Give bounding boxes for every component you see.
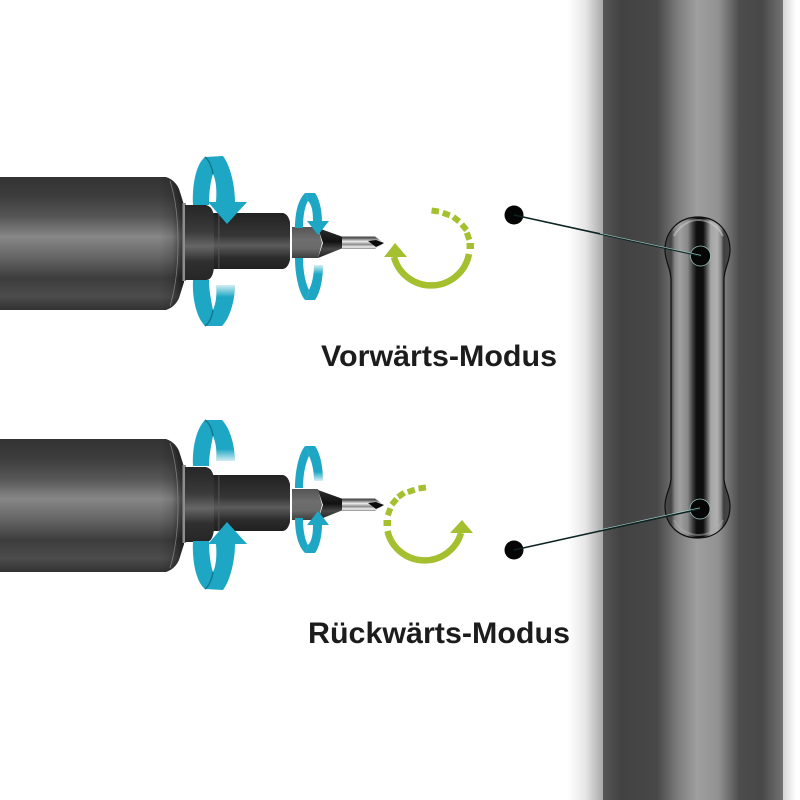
forward marker dot: [504, 206, 524, 224]
mode switch slot: [665, 217, 730, 538]
top rotation arrows: [193, 156, 329, 326]
bottom green counter-clockwise arrow: [384, 484, 473, 560]
reverse leader line: [514, 508, 700, 550]
switch reverse point: [690, 499, 710, 519]
reverse marker dot: [504, 540, 524, 560]
switch forward point: [690, 246, 710, 266]
bottom rotation arrows: [193, 420, 329, 590]
bottom driver: reverse mode: [0, 439, 384, 572]
screwdriver handle with mode switch: [568, 0, 796, 800]
heading: forward mode: Vorwärts-Modus: [321, 340, 557, 373]
top driver: forward mode: [0, 177, 384, 310]
forward leader line: [514, 215, 701, 256]
top green clockwise arrow: [384, 208, 474, 285]
heading: reverse mode: Rückwärts-Modus: [308, 617, 570, 650]
